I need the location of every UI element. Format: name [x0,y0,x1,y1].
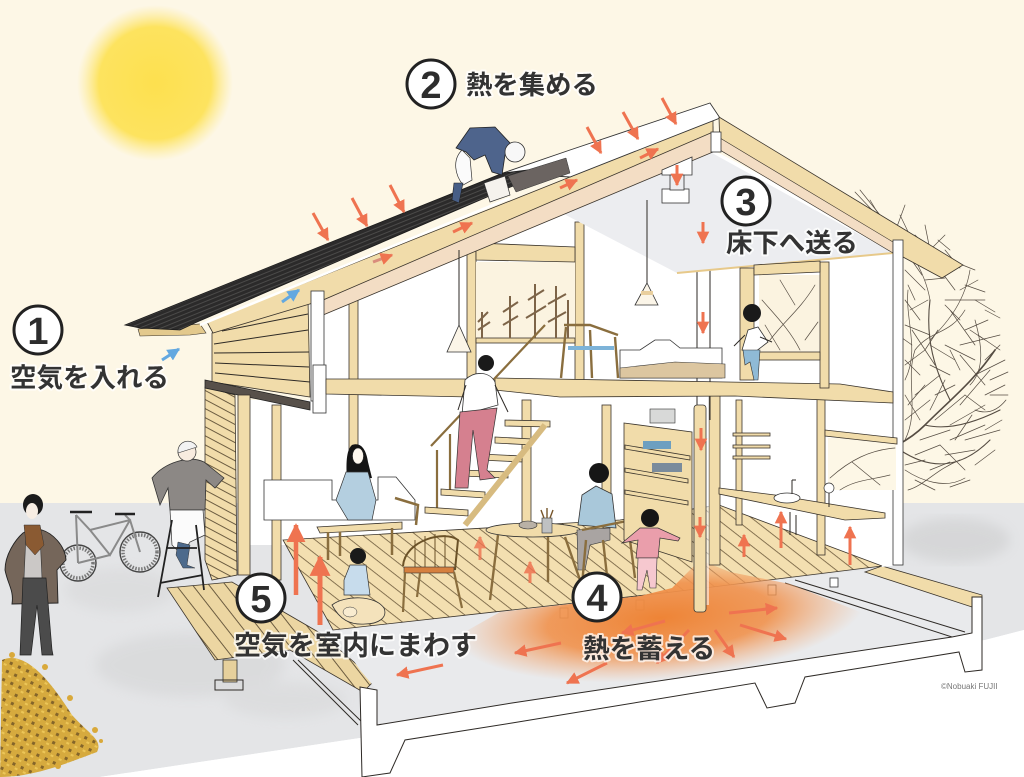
woman on sofa [336,444,376,520]
rafter air channel [207,113,713,333]
sun [77,5,233,161]
dark shingle roof [125,165,568,330]
foundation side lines [293,660,410,725]
step 3 badge [722,177,770,225]
warm air rising arrows [296,512,850,625]
dining table [486,508,580,600]
lower right window [825,430,897,490]
child in pink [622,509,680,590]
white lower foreground [100,630,1024,777]
seated child [344,548,370,595]
heat storage glow [468,563,856,680]
step 1 badge [14,306,62,354]
white post covers at wall [311,240,903,565]
child upstairs [734,304,772,380]
slab surface [333,568,972,725]
dark eave over lower wall [205,380,310,410]
attic ceiling grey gable [560,153,893,273]
wooden armchair [403,534,462,612]
white glass collector roof [503,103,720,177]
tan structural posts [238,222,825,580]
duct arrows [677,165,703,537]
shelving unit [624,409,692,562]
step 4 badge [573,573,621,621]
bare tree behind the house [838,190,1008,490]
deck [167,582,375,692]
floor joist blocks [560,578,838,618]
lower left siding [205,387,237,580]
step 2 badge: 2 [420,65,442,107]
wall interior white [250,150,900,567]
upper beam [326,379,470,397]
man on ladder [152,441,224,568]
air channel arrows [373,149,658,262]
right eave inner band [720,138,893,253]
sky background [0,0,1024,504]
wood floor [283,505,882,630]
ladder [158,520,204,597]
copyright: ©Nobuaki FUJII [941,682,998,691]
step 5 label: 空気を室内にまわす [234,631,477,661]
mezzanine floor [495,378,893,403]
structural pipe [694,405,706,612]
bed [620,340,725,378]
step 5 badge: 5 [250,579,272,621]
grass texture left [65,568,345,718]
woman with coat [5,494,66,655]
step 4 badge: 4 [586,578,608,620]
pile of autumn leaves [0,652,103,777]
step 2 badge [407,60,455,108]
step 5 badge [237,574,285,622]
foundation [360,597,982,777]
ground [0,503,1024,777]
stairs [425,420,550,525]
stair handrail [431,325,545,510]
right eave rafter [719,117,963,278]
sofa [264,477,418,525]
ridge box [711,132,721,152]
blue intake arrows [162,290,299,360]
air chamber boxes [662,157,692,203]
pendant lamp left [447,250,471,352]
duct [689,197,710,606]
wall shelves [733,433,770,459]
pendant lamp right [635,200,658,305]
dog [332,598,385,624]
man climbing stairs [455,355,508,488]
man on roof [452,127,525,203]
bicycle [60,512,160,581]
solar heat arrows on roof [313,98,676,240]
step 3 badge: 3 [735,182,757,224]
roof insulation band [323,127,713,315]
grass texture right [900,518,1010,562]
step 4 label: 熱を蓄える [583,634,715,664]
deck post [215,660,243,690]
step 1 label: 空気を入れる [10,363,169,393]
chair by dining table [582,520,635,585]
upper siding [212,300,310,397]
rafter tails under eave [138,324,206,336]
sink and mirror [774,480,834,535]
wash counter [719,488,885,520]
floor heat spreading arrows [397,608,786,683]
step 2 label: 熱を集める [466,70,598,100]
step 3 label: 床下へ送る [726,228,858,258]
back window with plants [476,243,575,343]
slab right strip [865,566,982,607]
coffee table [317,522,402,560]
white flashing under shingles [200,198,510,325]
grey panels on roof [508,158,570,192]
dining chair upstairs [561,325,618,378]
upper room window with tree [740,261,829,388]
step 1 badge: 1 [27,311,49,353]
seated man [577,463,616,570]
